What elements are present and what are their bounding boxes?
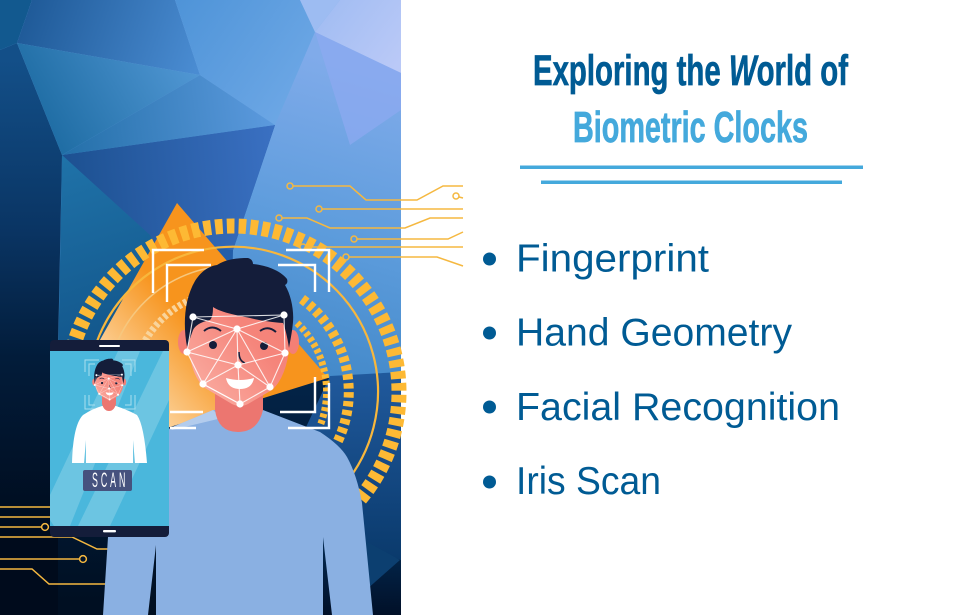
shape: orange triangle xyxy=(60,203,328,461)
title: Exploring the World of xyxy=(533,47,848,95)
person: torso and arms xyxy=(103,385,373,615)
mini head xyxy=(92,359,126,401)
panel: polygon blue background xyxy=(0,0,401,615)
ears xyxy=(178,330,190,354)
screen xyxy=(50,351,169,526)
item: Iris Scan: Iris Scan xyxy=(516,460,661,503)
mini scan brackets xyxy=(85,360,135,409)
hair xyxy=(185,258,293,348)
item: Facial Recognition: Facial Recognition xyxy=(516,386,840,429)
scan button: SCAN xyxy=(92,469,128,492)
eyes and brows xyxy=(209,341,217,349)
nose xyxy=(239,352,245,363)
neck xyxy=(215,385,263,432)
face xyxy=(188,290,290,406)
item: Fingerprint: Fingerprint xyxy=(516,238,709,280)
face scan brackets xyxy=(153,250,329,428)
mini person body xyxy=(72,406,147,463)
tablet xyxy=(50,340,169,537)
graphic: concentric scanner rings xyxy=(67,226,399,499)
title underlines xyxy=(520,166,863,184)
circuit lines: top right xyxy=(276,183,463,266)
face mesh xyxy=(187,315,285,404)
mouth xyxy=(226,378,254,389)
circuit lines: bottom left xyxy=(0,507,108,584)
person: head with face mesh xyxy=(178,258,299,408)
bullet list xyxy=(483,238,840,503)
item: Hand Geometry: Hand Geometry xyxy=(516,312,793,354)
title xyxy=(533,47,848,152)
title: Biometric Clocks xyxy=(573,103,808,152)
